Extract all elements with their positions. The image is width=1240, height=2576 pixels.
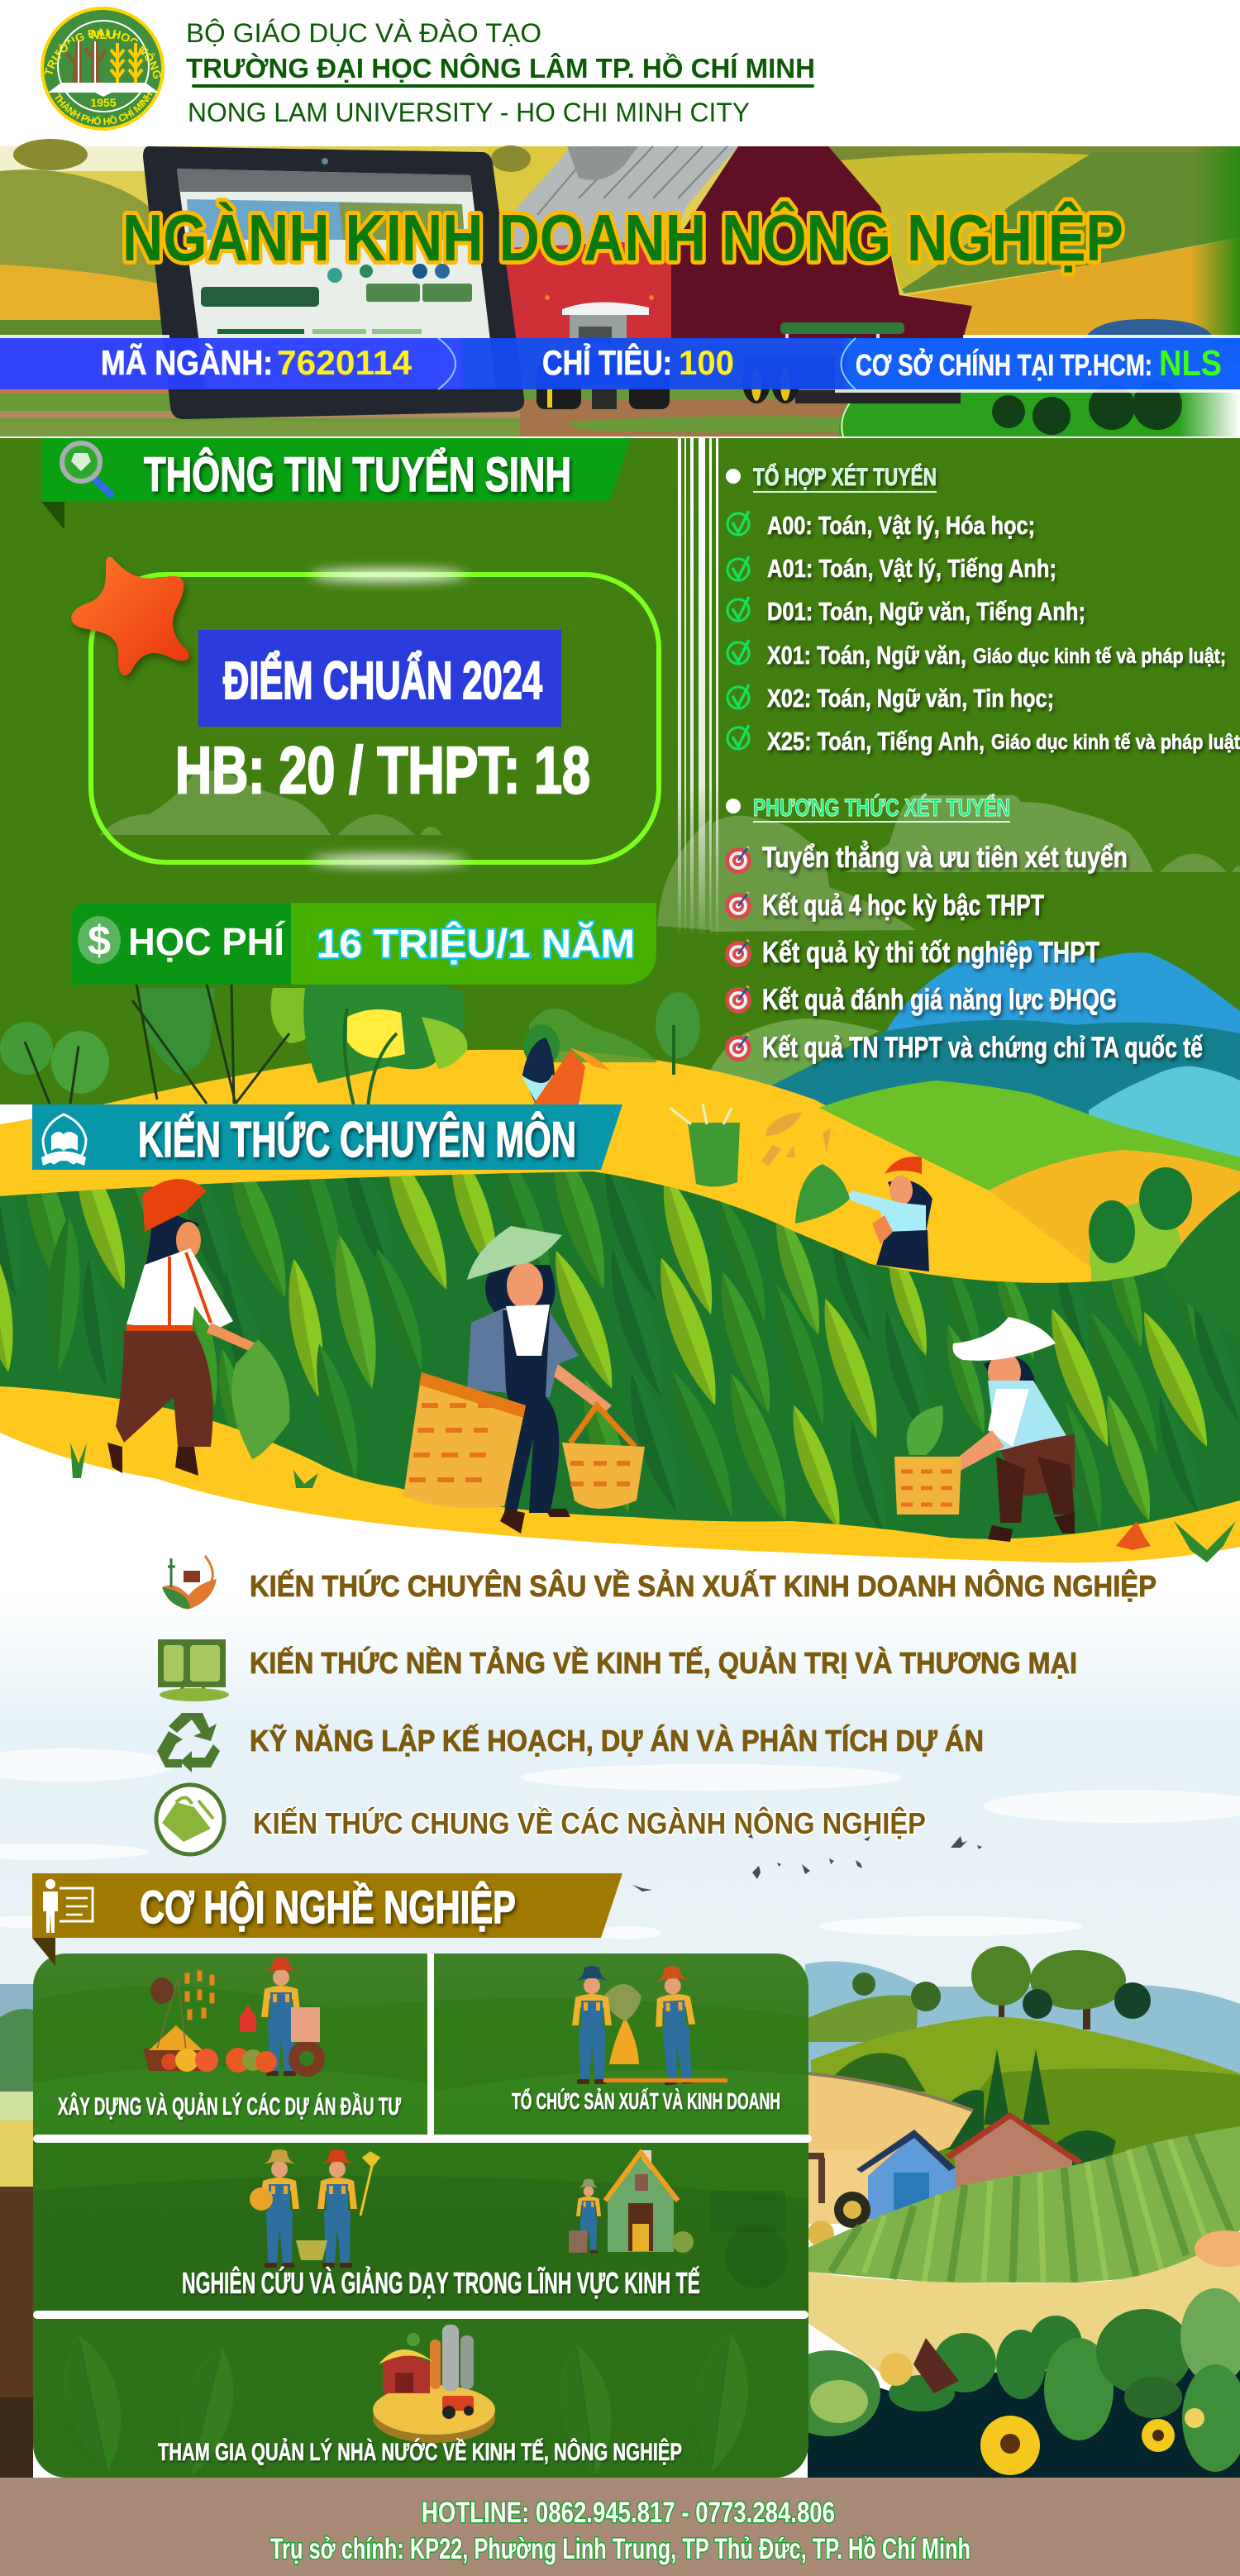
cell: state management [158,2325,682,2466]
label: major code: MÃ NGÀNH: [101,343,273,382]
item X02: X02: Toán, Ngữ văn, Tin học; [767,684,1054,713]
item D01: D01: Toán, Ngữ văn, Tiếng Anh; [767,597,1085,626]
background: green admissions panel [0,438,1240,1104]
icon: orange star [71,556,189,675]
value: tuition: 16 TRIỆU/1 NĂM [317,921,635,966]
item 3: KỸ NĂNG LẬP KẾ HOẠCH, DỰ ÁN VÀ PHÂN TÍCH DỰ ÁN [250,1723,984,1758]
icon: magnifier [62,443,111,494]
divider bars [33,1953,812,2319]
heading: English name: NONG LAM UNIVERSITY - HO CHI MINH CITY [188,98,750,127]
item 3 [157,1713,984,1772]
icon: dollar: $ [88,918,111,964]
banner: farm scene with tablet and barn [0,139,1240,436]
illustration: plants and yellow hill [0,984,1240,1562]
heading text: KIẾN THỨC CHUYÊN MÔN [138,1112,576,1167]
list: subject combinations [726,463,1240,756]
icon: university logo: THÀNH PHỐ HỒ CHÍ MINH [55,93,152,126]
farmer: woman with baskets [403,1226,645,1534]
heading: admission methods: PHƯƠNG THỨC XÉT TUYỂN [753,794,1010,822]
highlight top [310,570,467,581]
straw hill [808,2073,973,2224]
icon: book emblem [41,1114,86,1166]
crop rows [808,2126,1240,2283]
list: admission methods [725,794,1203,1064]
item X01: X01: Toán, Ngữ văn, [767,641,966,670]
panel: tuition [71,903,656,985]
farmer: woman in red hat [107,1179,290,1476]
hotline: HOTLINE: 0862.945.817 - 0773.284.806 [422,2497,835,2529]
main hill [811,2016,1240,2182]
decorative leaves on hill [761,1112,831,1166]
cell: research and teaching [182,2149,700,2300]
scores: HB: 20 / THPT: 18 [175,733,590,807]
right side green bushes [1089,1167,1240,1339]
heading: university name: TRƯỜNG ĐẠI HỌC NÔNG LÂM TP. HỒ CHÍ MINH [186,52,815,83]
label box: benchmark 2024 [198,630,561,727]
small plants on the path [70,1443,1236,1562]
method 3: Kết quả kỳ thi tốt nghiệp THPT [762,937,1099,969]
heading text: CƠ HỘI NGHỀ NGHIỆP [140,1881,516,1933]
icon: eco bag [156,1785,224,1854]
cell: production and business: TỔ CHỨC SẢN XUẤT VÀ KINH DOANH [512,2087,780,2114]
item A00: A00: Toán, Vật lý, Hóa học; [767,511,1035,540]
footer [0,2478,1240,2576]
value: major code: 7620114 [277,343,413,382]
illustration: farmers and green house [250,2149,694,2268]
panel: benchmark scores [71,556,659,866]
leaf field [0,1171,1240,1539]
label: quota: CHỈ TIÊU: [542,342,672,382]
illustration: crop field with farmers [0,1104,1240,1562]
tractor behind panel [808,2153,870,2247]
heading text: THÔNG TIN TUYỂN SINH [144,448,571,502]
cell: research and teaching: NGHIÊN CỨU VÀ GIẢNG DẠY TRONG LĨNH VỰC KINH TẾ [182,2265,700,2300]
method 4: Kết quả đánh giá năng lực ĐHQG [762,984,1117,1016]
icon: university logo [41,7,165,131]
icon: university logo: NLU [91,28,116,42]
tractor [537,295,670,409]
small flame plant [1116,1521,1151,1550]
cell: state management: THAM GIA QUẢN LÝ NHÀ NƯỚC VỀ KINH TẾ, NÔNG NGHIỆP [158,2438,682,2466]
trees [835,1946,1151,2170]
cell: investment projects: XÂY DỰNG VÀ QUẢN LÝ CÁC DỰ ÁN ĐẦU TƯ [58,2092,401,2120]
landscape: hills behind admissions panel [99,770,1240,1174]
heading panel: admissions information [41,438,631,530]
mountains [805,1961,1240,2083]
band: admissions key facts [0,335,1240,393]
barn [506,146,972,339]
tablet [143,146,524,419]
illustration: farm on disc [373,2325,495,2443]
method 2: Kết quả 4 học kỳ bậc THPT [762,890,1044,922]
heading panel: professional knowledge [32,1104,622,1170]
clouds [0,1748,1240,1939]
toucan bird [521,1024,610,1108]
item X01 [727,640,1226,670]
label: tuition: HỌC PHÍ [128,920,285,963]
item X25: X25: Toán, Tiếng Anh, [767,727,985,756]
yellow soil band [808,2232,1240,2381]
item 2: KIẾN THỨC NỀN TẢNG VỀ KINH TẾ, QUẢN TRỊ VÀ THƯƠNG MẠI [250,1645,1077,1680]
item A01: A01: Toán, Vật lý, Tiếng Anh; [767,554,1056,583]
icon: university logo: 1955 [90,96,117,109]
list: knowledge items [156,1556,1157,1854]
method 2 [725,890,1044,922]
far hill [808,1995,918,2042]
farmer: worker with white hat [894,1317,1075,1542]
value: campus code: NLS [1159,343,1222,384]
ground [0,364,1240,436]
illustration: farmer with produce [143,1958,325,2077]
blue tank [1085,319,1214,339]
item 2 [158,1639,1077,1701]
item X25 [727,725,1240,756]
item 4: KIẾN THỨC CHUNG VỀ CÁC NGÀNH NÔNG NGHIỆP [253,1806,926,1840]
highlight bottom [310,855,467,866]
landscape: farmland scene [0,1946,1240,2478]
header: university identity [41,7,815,131]
heading: ministry: BỘ GIÁO DỤC VÀ ĐÀO TẠO [186,18,541,48]
cell: investment projects [58,1958,401,2120]
item 4 [156,1785,926,1854]
blue house [856,2130,956,2220]
sky background for lower sections [0,1596,1240,2025]
heading panel: career opportunities [32,1873,622,1966]
method 1: Tuyển thẳng và ưu tiên xét tuyển [762,841,1128,874]
green implement [742,322,904,403]
left strip [0,1984,50,2478]
farmer: woman on hill [795,1157,932,1271]
icon: farm leaf [162,1556,217,1609]
birds [632,1834,982,1891]
cell: production and business [512,1965,780,2114]
item 1 [162,1556,1157,1609]
plants foreground [778,2288,1240,2478]
plant pot [670,1104,740,1187]
brick house [945,2112,1083,2201]
icon: dollar [78,916,121,964]
icon: solar panel [158,1639,229,1701]
heading: subject combinations: TỔ HỢP XÉT TUYỂN [753,463,937,491]
vertical light stripes [678,438,718,934]
icon: presenter [43,1879,93,1933]
panel: career opportunities [33,1953,812,2482]
flowers [880,2230,1240,2475]
item 1: KIẾN THỨC CHUYÊN SÂU VỀ SẢN XUẤT KINH DOANH NÔNG NGHIỆP [250,1568,1157,1603]
icon: recycle [157,1713,220,1772]
address: Trụ sở chính: KP22, Phường Linh Trung, TP Thủ Đức, TP. Hồ Chí Minh [270,2533,971,2565]
illustration: two farmers [572,1965,727,2086]
value: quota: 100 [679,343,734,382]
label box: benchmark 2024: ĐIỂM CHUẨN 2024 [223,650,542,710]
label: campus: CƠ SỞ CHÍNH TẠI TP.HCM: [856,347,1152,382]
